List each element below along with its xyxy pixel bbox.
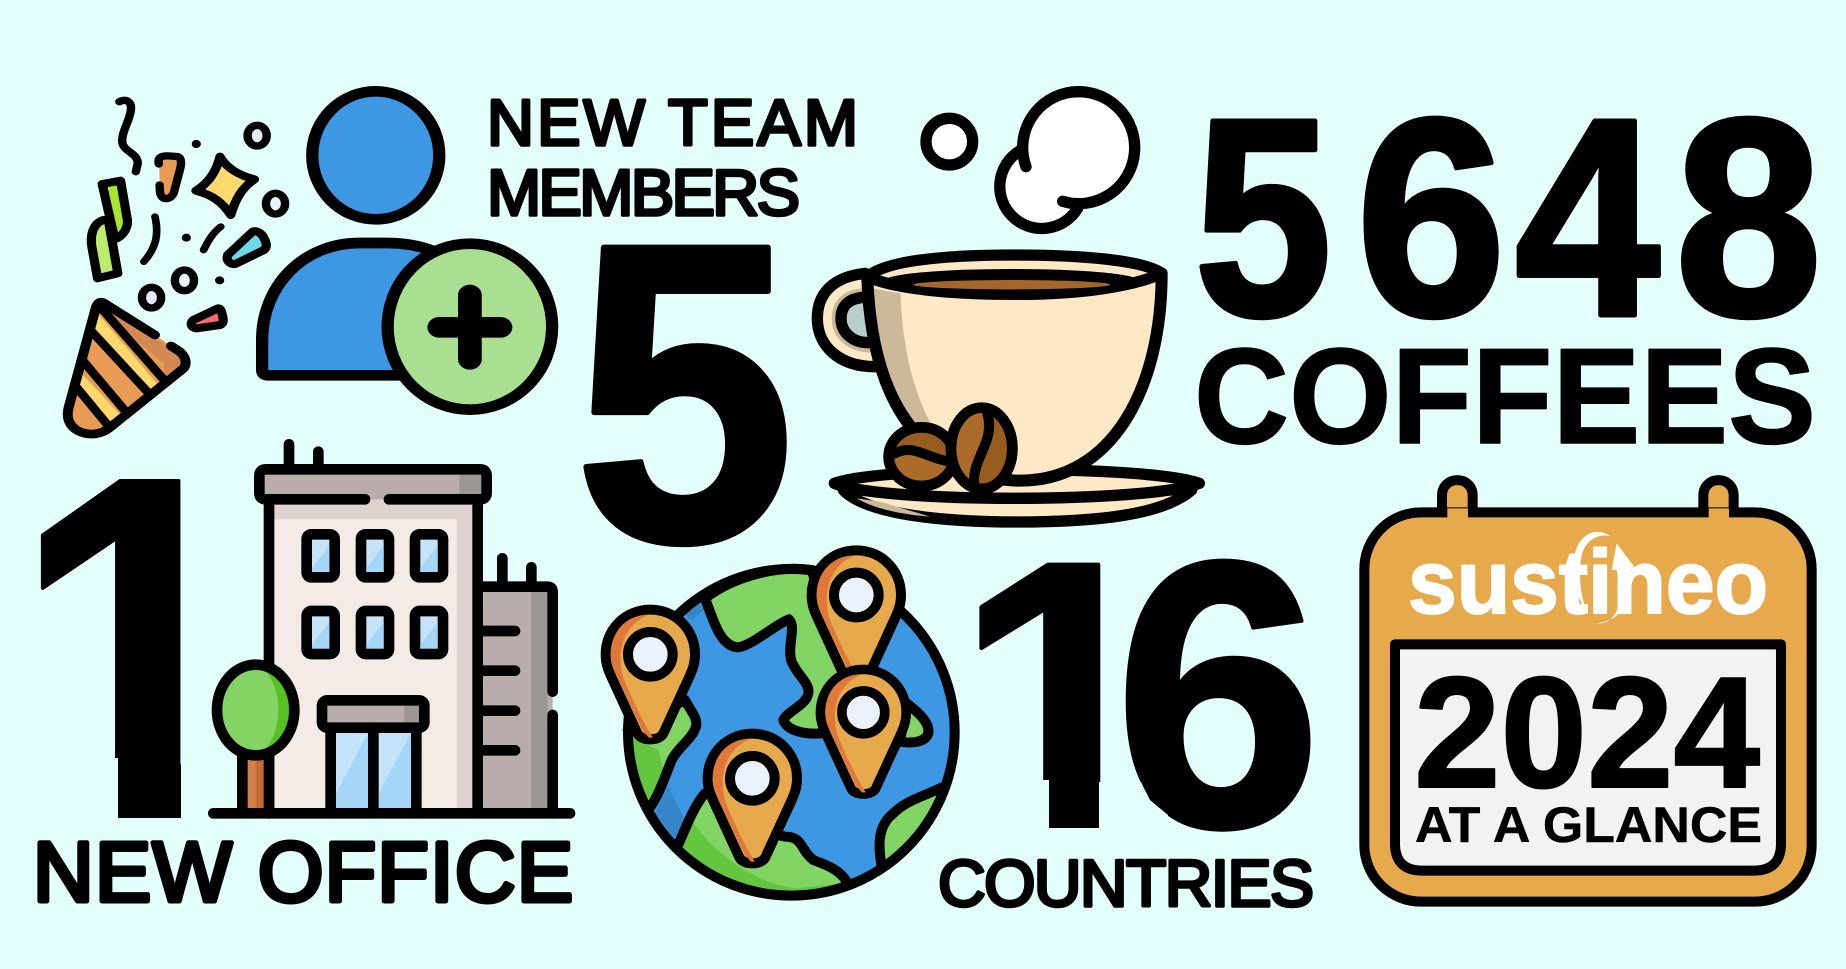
icon: office building with tree <box>213 444 570 813</box>
logo: sustineo: sustineo <box>1408 533 1768 633</box>
label: new office: NEW OFFICE <box>33 825 573 919</box>
big number: 16 countries: 6 <box>1114 482 1322 907</box>
icon: new team member person with plus <box>262 91 552 410</box>
icon: globe with location pins <box>606 550 955 896</box>
icon: coffee cup with steam and beans <box>817 92 1199 522</box>
icon: party popper <box>68 100 285 434</box>
big number: 5648: 4 <box>1515 60 1662 375</box>
text: 2024: 2024 <box>1414 645 1760 821</box>
text: new team members: NEW TEAM <box>487 86 858 159</box>
big number: 16 countries: 1 <box>955 482 1170 907</box>
big number: 5648: 8 <box>1675 60 1822 375</box>
calendar badge <box>1364 480 1812 902</box>
text: new team members <box>487 86 858 229</box>
calendar body <box>1364 480 1812 902</box>
text: new team members: MEMBERS <box>487 156 800 229</box>
big number: 5 team members: 5 <box>574 156 795 631</box>
label: coffees: COFFEES <box>1194 320 1816 472</box>
label: countries: COUNTRIES <box>938 846 1314 920</box>
big number: 5648: 6 <box>1356 60 1506 375</box>
text: at a glance: AT A GLANCE <box>1415 797 1762 853</box>
big number: 1 new office: 1 <box>12 376 262 920</box>
big number: 5648: 5 <box>1194 60 1332 375</box>
